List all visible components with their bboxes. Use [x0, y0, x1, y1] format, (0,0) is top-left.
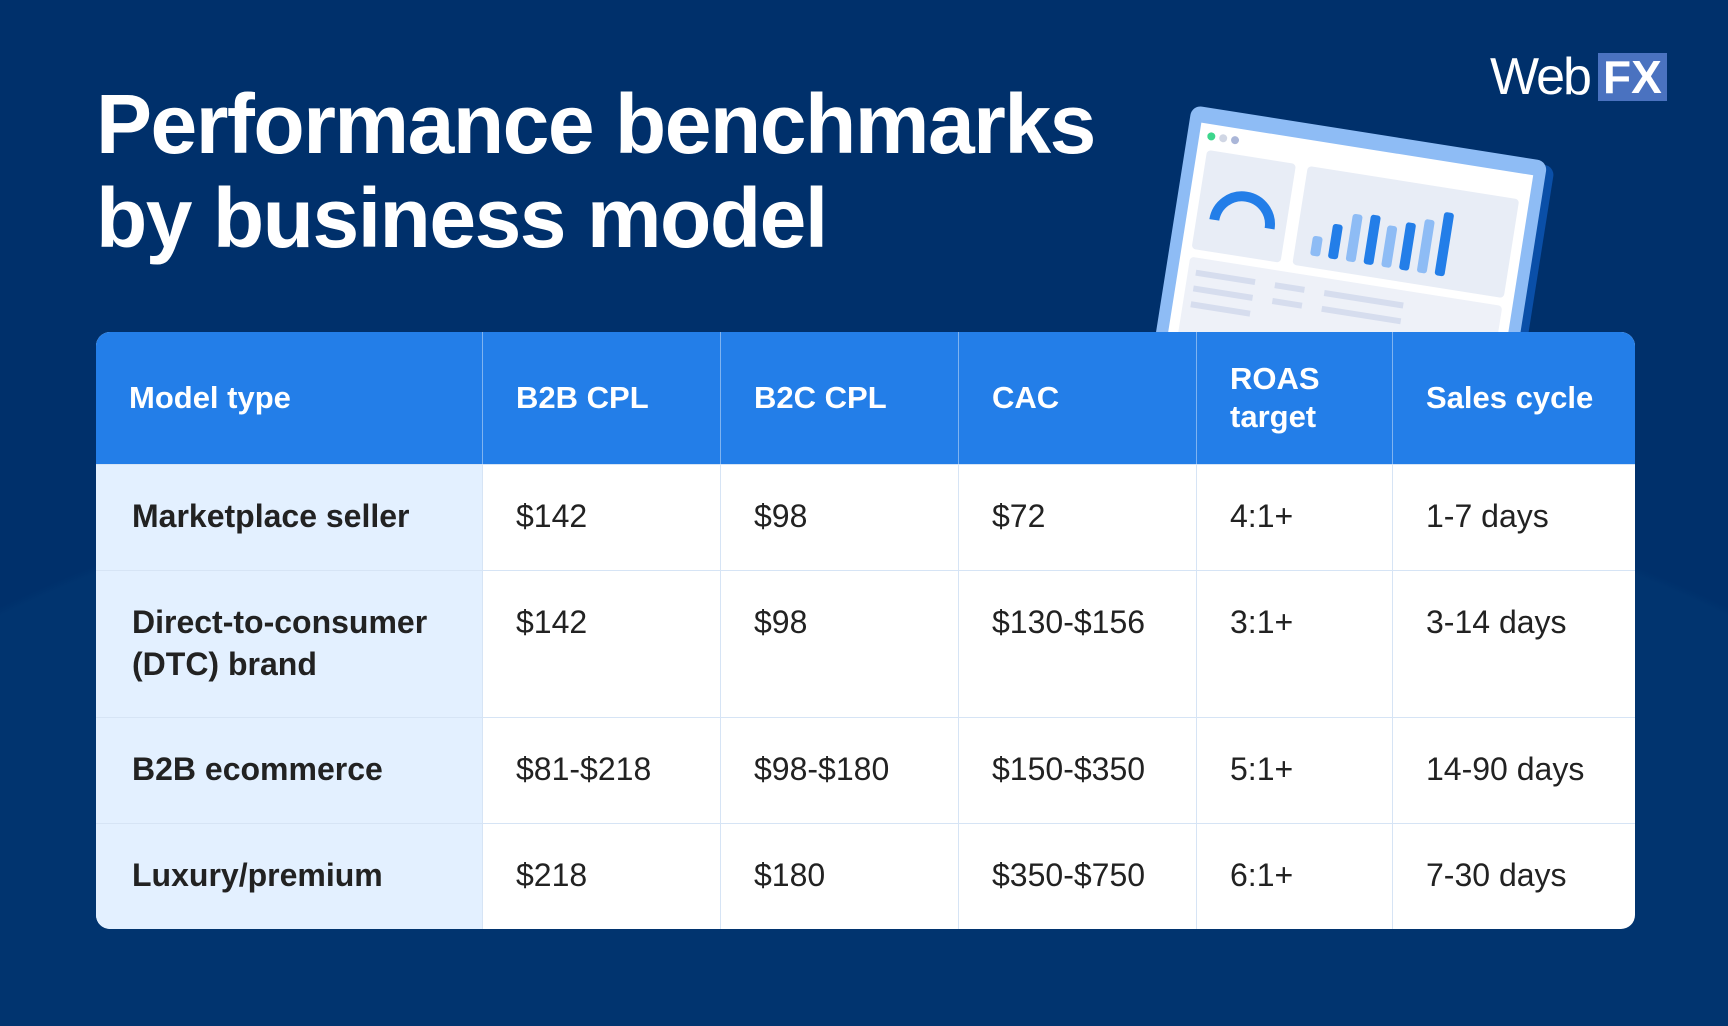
row: luxury/premium: Luxury/premium — [132, 857, 383, 893]
row: DTC brand: 3-14 days — [1426, 604, 1567, 640]
row: luxury/premium — [96, 823, 1635, 929]
row: luxury/premium: 6:1+ — [1230, 857, 1293, 893]
row: DTC brand: $142 — [516, 604, 587, 640]
title: by business model — [96, 171, 827, 265]
table header: target — [1230, 399, 1316, 434]
table header: Model type — [129, 380, 291, 415]
row: luxury/premium: 7-30 days — [1426, 857, 1567, 893]
row: marketplace seller: $98 — [754, 498, 807, 534]
row: B2B ecommerce: $150-$350 — [992, 751, 1145, 787]
row: B2B ecommerce: 5:1+ — [1230, 751, 1293, 787]
title — [96, 77, 1095, 265]
row: B2B ecommerce: B2B ecommerce — [132, 751, 383, 787]
row: DTC brand: Direct-to-consumer — [132, 604, 427, 640]
row: marketplace seller: Marketplace seller — [132, 498, 410, 534]
row: DTC brand: $130-$156 — [992, 604, 1145, 640]
row: DTC brand: $98 — [754, 604, 807, 640]
table header: B2C CPL — [754, 380, 887, 415]
table: benchmarks — [96, 332, 1635, 929]
title: Performance benchmarks — [96, 77, 1095, 171]
row: B2B ecommerce: $81-$218 — [516, 751, 651, 787]
logo: WebFX: Web — [1490, 48, 1590, 106]
row: marketplace seller — [96, 464, 1635, 570]
table header: ROAS — [1230, 361, 1320, 396]
row: luxury/premium: $350-$750 — [992, 857, 1145, 893]
row: DTC brand: 3:1+ — [1230, 604, 1293, 640]
row: marketplace seller: $142 — [516, 498, 587, 534]
table header — [96, 332, 1635, 929]
logo: WebFX — [1490, 48, 1667, 106]
table header: Sales cycle — [1426, 380, 1593, 415]
row: luxury/premium: $180 — [754, 857, 825, 893]
row: luxury/premium: $218 — [516, 857, 587, 893]
table header: B2B CPL — [516, 380, 649, 415]
row: DTC brand — [96, 570, 1635, 717]
row: marketplace seller: 4:1+ — [1230, 498, 1293, 534]
row: B2B ecommerce: $98-$180 — [754, 751, 889, 787]
row: B2B ecommerce — [96, 717, 1635, 823]
row: DTC brand: (DTC) brand — [132, 646, 317, 682]
row: B2B ecommerce: 14-90 days — [1426, 751, 1584, 787]
table header: CAC — [992, 380, 1059, 415]
row: marketplace seller: 1-7 days — [1426, 498, 1549, 534]
row: marketplace seller: $72 — [992, 498, 1045, 534]
logo: WebFX: FX — [1603, 51, 1662, 103]
illustration: laptop dashboard — [1156, 106, 1554, 332]
